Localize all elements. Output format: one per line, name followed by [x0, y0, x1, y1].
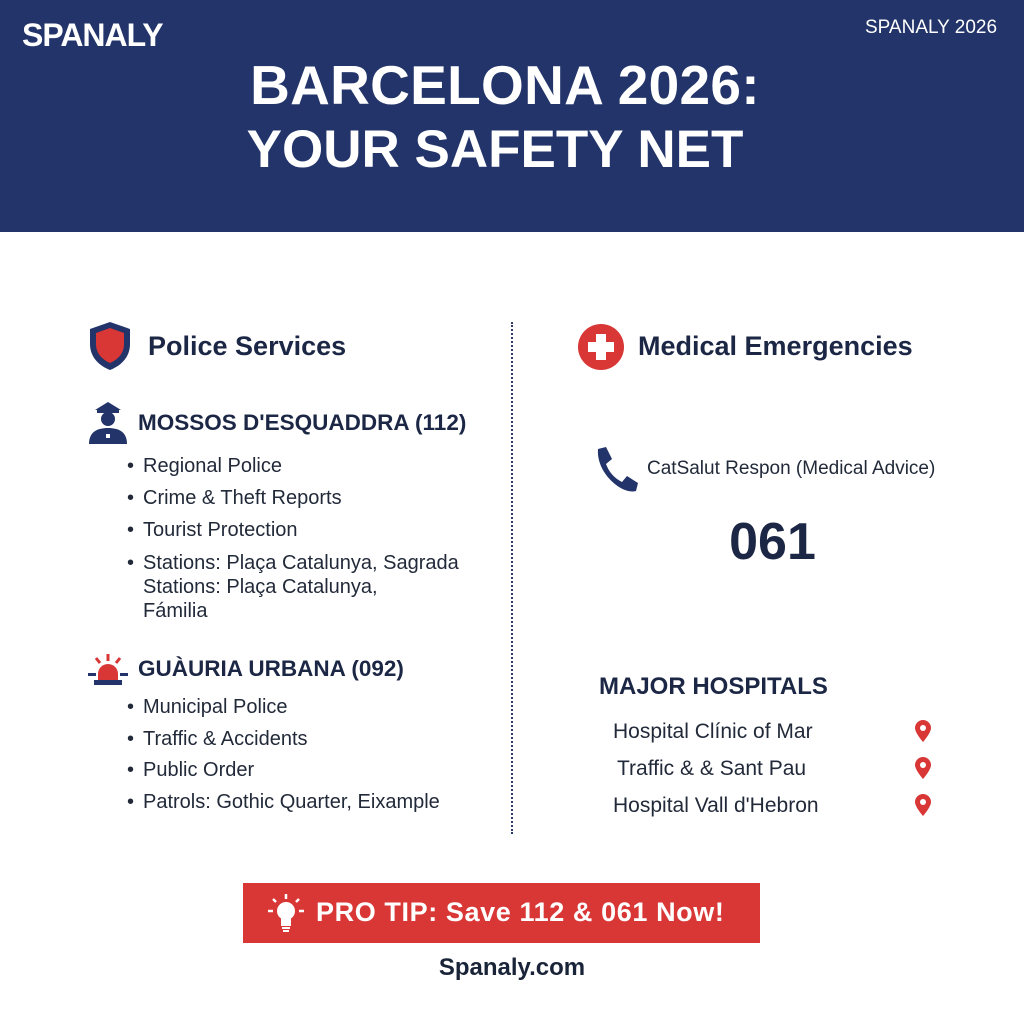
list: guardia: Traffic & Accidents: [143, 728, 308, 750]
header band: [0, 0, 1024, 232]
list: guardia: Patrols: Gothic Quarter, Eixample: [143, 791, 440, 813]
title: YOUR SAFETY NET: [247, 120, 743, 179]
year tag: SPANALY 2026: [865, 17, 997, 38]
heading: guardia: GUÀURIA URBANA (092): [138, 656, 404, 681]
icon: red cross: [578, 324, 624, 370]
title: [247, 54, 760, 179]
list: mossos: Crime & Theft Reports: [143, 487, 342, 509]
list: mossos: Regional Police: [143, 455, 282, 477]
brand logo: SPANALY: [22, 17, 163, 53]
icons: pins: [915, 720, 931, 816]
heading: mossos: MOSSOS D'ESQUADDRA (112): [138, 410, 466, 435]
list: mossos: Fámilia: [143, 600, 207, 622]
heading: police services: Police Services: [148, 331, 346, 361]
callout: pro tip: [243, 883, 760, 943]
divider: [511, 322, 513, 834]
heading: medical: Medical Emergencies: [638, 331, 913, 361]
heading: hospitals: MAJOR HOSPITALS: [599, 673, 828, 700]
list: mossos: Tourist Protection: [143, 519, 298, 541]
number: 061: 061: [729, 513, 816, 571]
list: mossos: Stations: Plaça Catalunya, Sagrada: [143, 552, 459, 574]
list: mossos: [128, 455, 459, 622]
icon: bulb: [268, 894, 304, 932]
panel: medical: [578, 324, 935, 817]
list: guardia: [128, 696, 440, 813]
panel: police: [88, 322, 466, 813]
text: catsalut: CatSalut Respon (Medical Advice): [647, 458, 935, 479]
footer url: Spanaly.com: [439, 954, 585, 981]
list: hospitals: [613, 720, 931, 817]
list: hospitals: Hospital Clínic of Mar: [613, 720, 813, 743]
list: guardia: Public Order: [143, 759, 254, 781]
list: guardia: Municipal Police: [143, 696, 288, 718]
callout: pro tip: PRO TIP: Save 112 & 061 Now!: [316, 897, 724, 927]
icon: shield: [90, 322, 130, 370]
title: BARCELONA 2026:: [250, 54, 760, 116]
icon: siren: [88, 654, 128, 685]
icon: officer: [89, 402, 127, 444]
list: hospitals: Hospital Vall d'Hebron: [613, 794, 819, 817]
list: hospitals: Traffic & & Sant Pau: [617, 757, 806, 780]
icon: phone: [598, 447, 638, 492]
list: mossos: Stations: Plaça Catalunya,: [143, 576, 378, 598]
